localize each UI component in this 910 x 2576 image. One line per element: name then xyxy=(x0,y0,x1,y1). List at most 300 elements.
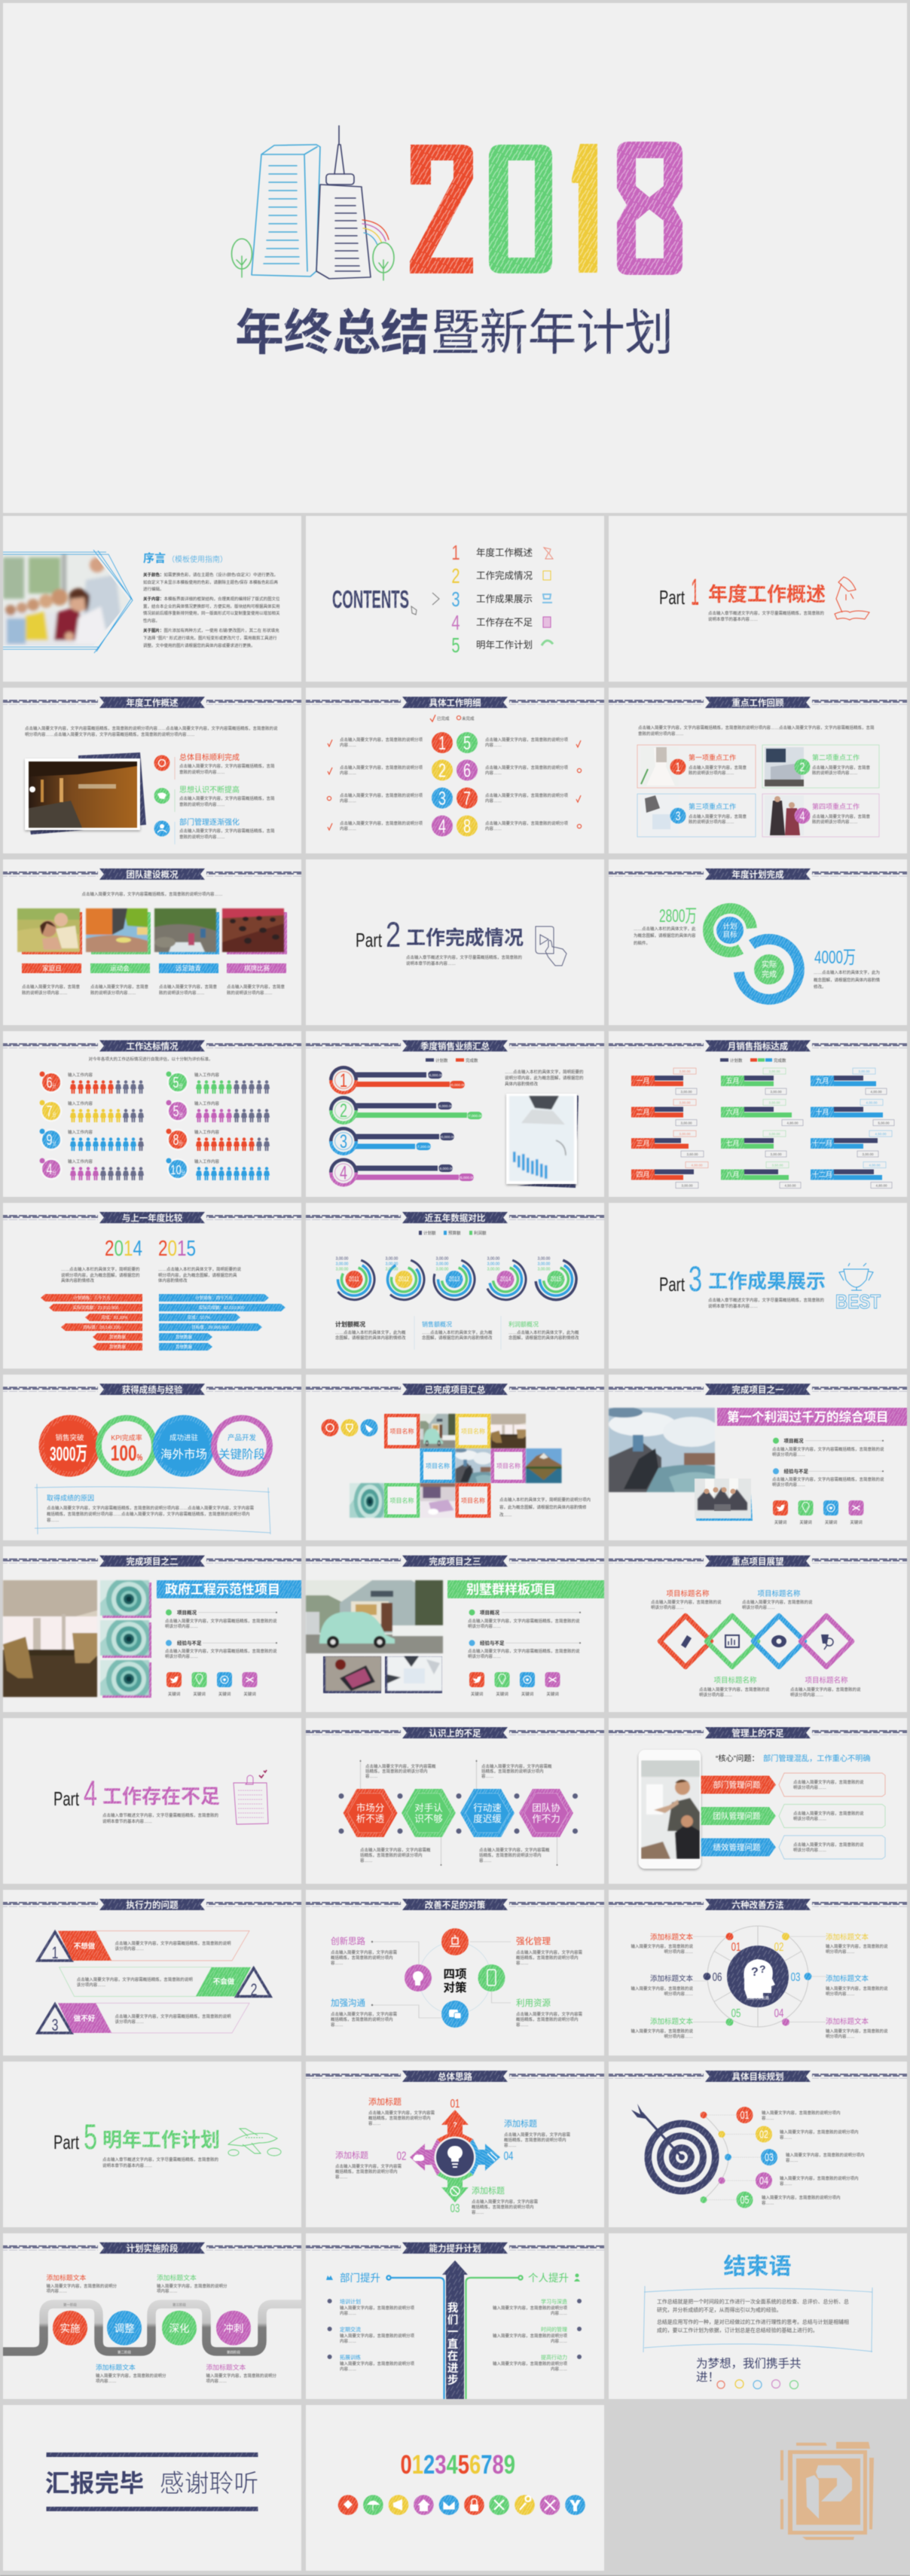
right list: 内容…… xyxy=(551,2310,567,2316)
legend: 完成数 xyxy=(466,1058,478,1064)
item: top: 点击输入简要文字内容，文字内容需 xyxy=(368,2110,435,2116)
header ribbon xyxy=(609,1555,907,1567)
item: left: 概括精炼，言简意赅的说明分项内 xyxy=(335,2169,398,2175)
item: project overview: 明该分项内容…… xyxy=(165,1623,198,1629)
right labels: 明分项内容…… xyxy=(826,1991,855,1997)
item: resources: 容…… xyxy=(516,2022,529,2028)
left list: 输入简要文字内容，言简意赅的说明分项 xyxy=(340,2305,415,2311)
ring chart 2012: 2012 xyxy=(399,1275,409,1283)
goal 02: 容…… xyxy=(780,2135,792,2141)
item: awareness: 点击输入简要文字内容，文字内容需概括精炼，言简 xyxy=(179,795,275,801)
phone with photo xyxy=(639,1750,701,1869)
description: 说明本章节的基本内容…… xyxy=(102,1818,152,1824)
icon: clipboard with hearts xyxy=(234,1770,268,1824)
row 2: not able: 该分项内容…… xyxy=(77,1982,105,1988)
item: management: 概括精炼，言简意赅的说明分项内 xyxy=(516,1955,579,1961)
ring chart 2015 xyxy=(530,1253,582,1305)
descriptions: 赅的说明该分项内容…… xyxy=(159,990,205,996)
arrow: department: 部门管理问题 xyxy=(713,1780,761,1790)
monthly unit: 十一月 xyxy=(811,1131,892,1157)
2015 arrows: 计划销售：四千万元 xyxy=(195,1295,233,1301)
header ribbon: 季度销售业绩汇总 xyxy=(420,1041,490,1051)
decorative hexagon frame lines xyxy=(3,550,133,653)
heading: part 3 xyxy=(659,1259,826,1299)
header ribbon xyxy=(306,1555,604,1567)
node dots and numbers: 03 xyxy=(791,1970,801,1983)
panel: closing text: 总结是应用写作的一种，是对已经做过的工作进行理性的思考。总结与计划是相辅相 xyxy=(657,2318,849,2325)
column: profit xyxy=(501,1316,579,1350)
slide: specific goals xyxy=(609,2062,907,2227)
item: project overview: 项目概况 xyxy=(480,1609,500,1616)
description: 点击输入章节概述文字内容，文字尽量需概括精炼，言简意赅的 xyxy=(406,954,523,960)
digit 8 xyxy=(617,142,682,275)
list labels xyxy=(476,547,533,651)
banner xyxy=(157,1580,301,1598)
central arrow: 一 xyxy=(447,2327,458,2339)
score row 4 left: 输入工作内容 xyxy=(68,1158,93,1164)
descriptions: 点击输入简要文字内容，言简意 xyxy=(90,984,149,990)
target illustration xyxy=(631,2104,719,2195)
wheel: ? xyxy=(751,1966,759,1979)
panel: reasons: 点击输入简要文字内容，文字内容需概括精炼，言简意赅的说明分项内容……点击输入简要文字内容，文字内容需 xyxy=(47,1505,255,1511)
header ribbon xyxy=(306,2242,604,2254)
item: communication xyxy=(331,1998,398,2028)
numbered circles: 4 xyxy=(438,816,446,837)
right tasks: 内容…… xyxy=(485,826,502,832)
intro text: 点击输入简要文字内容，文字内容需概括精炼，言简意赅的说明分项内容……点击输入简要文字内容，文字内容需概括精炼，言简 xyxy=(638,725,875,731)
road path xyxy=(3,2304,301,2352)
stat circle: sales: 销售突破 xyxy=(55,1433,84,1442)
label: stage three: 添加标题文本 xyxy=(157,2273,197,2281)
column: plan: ……点击输入本栏的具体文字，此为概 xyxy=(335,1329,406,1335)
score row 3 left xyxy=(39,1128,144,1151)
keyword icons: 关键词 xyxy=(521,1691,534,1697)
hexagon: rivals: 识不够 xyxy=(414,1814,443,1824)
card: second key work: 2 xyxy=(800,761,805,775)
item: right: 容…… xyxy=(504,2142,517,2148)
banner xyxy=(717,1408,907,1426)
monthly unit: 三月: 3,60.00 xyxy=(686,1152,698,1156)
usage guide text: 关于内容： xyxy=(143,596,164,602)
hexagon: market xyxy=(344,1789,398,1837)
monthly unit: 五月: 3,00.00 xyxy=(770,1090,782,1094)
goal 01: 容…… xyxy=(762,2115,774,2121)
slide: part 4 divider xyxy=(3,1718,301,1884)
header ribbon: 能力提升计划 xyxy=(429,2243,481,2254)
wheel: ? xyxy=(759,1963,766,1975)
goal 03: 容…… xyxy=(786,2157,799,2163)
usage guide text: 下选择 "图片" 形式进行填充。图片短变形或更改尺寸，需用裁剪工具进行 xyxy=(143,635,277,641)
hexagon: speed: 行动速 xyxy=(473,1803,502,1814)
branch lines xyxy=(386,2275,523,2399)
goal arc xyxy=(704,2115,728,2199)
monthly unit: 七月: 3,00.00 xyxy=(768,1132,780,1136)
intro text: 点击输入简要文字内容，文字内容需概括精炼，言简意赅的说明分项内容……点击输入简要文字内容，文字内容需概括精炼，言简意赅的说 xyxy=(25,725,278,731)
monthly unit: 五月: 五月 xyxy=(725,1077,740,1085)
monthly unit: 八月: 3,50.00 xyxy=(771,1163,783,1167)
usage guide text: 如自定义下未显示本模板使用的色彩，请删除主题色/保存 本模板色彩后再 xyxy=(143,579,279,585)
usage guide text: 关于图片： xyxy=(143,627,164,633)
digits: 0123456789 xyxy=(401,2450,515,2480)
item: project overview: 点击输入简要文字内容，文字内容需概括精炼，言简意赅的说 xyxy=(468,1618,580,1624)
bottom notes: 点击输入简要文字内容，文字内容需概 xyxy=(479,1847,550,1853)
card: first key work xyxy=(637,745,756,788)
keyword icons: 关键词 xyxy=(168,1691,181,1697)
score row 4 right xyxy=(166,1158,270,1180)
left tasks: 点击输入简要文字内容，言简意赅的说明分项 xyxy=(340,820,423,826)
list labels: 明年工作计划 xyxy=(476,640,533,651)
item: awareness: 意赅的说明分项内容…… xyxy=(179,801,225,807)
slide: overall approach xyxy=(306,2062,604,2227)
header ribbon xyxy=(3,1212,301,1223)
mosaic row 3: 项目名称 xyxy=(390,1497,414,1504)
item: management: 意赅的说明分项内容…… xyxy=(179,834,225,840)
column: sales: 销售额概况 xyxy=(422,1320,452,1328)
score row 4 right: 输入工作内容 xyxy=(194,1158,220,1164)
thanks text: 汇报完毕 xyxy=(45,2470,144,2497)
stat: actual 4000万: 概念图解，请根据您的具体内容酌情 xyxy=(814,977,881,983)
core question title: 部门管理混乱，工作重心不明确 xyxy=(763,1753,871,1763)
header ribbon xyxy=(3,1384,301,1395)
item: communication: 概括精炼，言简意赅的说明分项内 xyxy=(331,2016,393,2022)
item: project overview xyxy=(165,1609,277,1629)
top project text xyxy=(651,1589,813,1610)
column: sales: 念图解，请根据您的具体内容酌情修改 xyxy=(422,1335,493,1341)
item: lessons: 明该分项内容…… xyxy=(165,1653,198,1659)
stat: actual 4000万 xyxy=(814,948,881,990)
four way arrows xyxy=(410,2110,500,2202)
heading: part 2: 工作完成情况 xyxy=(406,926,524,949)
header ribbon: 获得成绩与经验 xyxy=(122,1384,183,1395)
monthly unit: 五月: 3,00.00 xyxy=(768,1070,780,1073)
header ribbon: 近五年数据对比 xyxy=(425,1213,486,1223)
chart: actual ring xyxy=(739,939,799,1000)
2014 arrows: 完成：91.33% xyxy=(101,1314,128,1320)
monthly unit: 六月 xyxy=(721,1100,803,1125)
arrow numbers xyxy=(397,2096,514,2214)
column: profit: ……点击输入本栏的具体文字，此为概 xyxy=(508,1329,579,1335)
panel: reasons: 容…… xyxy=(47,1517,60,1523)
card: second key work: 赅的说明该分项内容…… xyxy=(812,770,858,776)
2015 arrows: 其他数据 xyxy=(176,1334,192,1340)
monthly unit: 八月: 八月 xyxy=(725,1170,740,1178)
photo: team at table xyxy=(695,1479,753,1521)
mosaic row 2: 项目名称 xyxy=(426,1462,450,1470)
slide: team building xyxy=(3,859,301,1025)
top project text: 点击输入简要文字内容，言简意赅的说 xyxy=(651,1599,722,1605)
node dots and numbers: 01 xyxy=(731,1940,741,1953)
score row 2 right: 5分 xyxy=(173,1103,183,1120)
slide: part 5 divider xyxy=(3,2062,301,2227)
ring chart 2013: 2013 xyxy=(449,1275,460,1283)
item: project overview: 点击输入简要文字内容，文字内容需概括精炼，言简意赅的说 xyxy=(772,1446,884,1452)
right list: 内容…… xyxy=(551,2338,567,2344)
descriptions: 赅的说明该分项内容…… xyxy=(227,990,273,996)
mosaic row 1: 项目名称 xyxy=(390,1427,414,1435)
list numbers xyxy=(451,542,460,658)
right tasks: 内容…… xyxy=(485,770,502,776)
road labels: 第四阶段 xyxy=(227,2350,240,2355)
item: management: 点击输入简要文字内容，文字内容需 xyxy=(516,1949,583,1955)
item: lessons: 经验与不足 xyxy=(177,1639,202,1647)
item: awareness: 思想认识不断提高 xyxy=(179,785,240,795)
stat circle: overseas xyxy=(153,1415,215,1477)
right list: 时间的管理 xyxy=(541,2326,567,2333)
road labels xyxy=(63,2302,240,2355)
label: stage two: 输入简要文字内容，言简意赅的说明分 xyxy=(96,2373,166,2379)
item: management xyxy=(154,817,275,844)
list labels: 工作成果展示 xyxy=(476,594,533,604)
ring chart 2014: 2014 xyxy=(500,1275,511,1283)
item: communication: 容…… xyxy=(331,2022,344,2028)
hexagon: market: 析不透 xyxy=(356,1814,385,1824)
node dots and numbers: 05 xyxy=(731,2006,741,2019)
score row 3 right: 输入工作内容 xyxy=(194,1129,220,1135)
stage circles: 调整 xyxy=(115,2323,134,2334)
stat: actual 4000万: 4000万 xyxy=(814,948,856,968)
digit 2 xyxy=(410,145,473,273)
right labels: 添加标题文本 xyxy=(826,1974,869,1983)
card: second key work: 第二项重点工作 xyxy=(812,753,860,762)
list labels: 工作存在不足 xyxy=(476,618,533,628)
goal 01 xyxy=(701,2107,841,2123)
stat: plan 2800万: 的稿件。 xyxy=(634,940,650,946)
ring chart 2011 xyxy=(328,1253,380,1305)
header ribbon xyxy=(306,1899,604,1910)
quarter bars 2 xyxy=(329,1096,483,1125)
stage circles: 冲刺 xyxy=(223,2323,244,2334)
right tasks: 内容…… xyxy=(485,798,502,804)
header ribbon xyxy=(3,868,301,880)
icon: trophy and best xyxy=(835,1263,881,1313)
left list: 内容…… xyxy=(340,2366,356,2372)
center label: 四项 xyxy=(443,1968,467,1981)
item: resources: 利用资源 xyxy=(516,1998,551,2008)
heading: part 2: Part xyxy=(356,929,383,951)
descriptions: 点击输入简要文字内容，言简意 xyxy=(227,984,286,990)
mosaic row 3: 项目名称 xyxy=(461,1497,485,1504)
node dots and numbers: 02 xyxy=(774,1940,784,1953)
item: lessons xyxy=(468,1639,581,1659)
slide: achievements and experience xyxy=(3,1375,301,1540)
left tasks: 内容…… xyxy=(340,826,356,832)
labels: 远足踏青 xyxy=(176,964,201,972)
quarter bars 1: 20,000.00 xyxy=(449,1083,466,1088)
2014 arrows: 其他数据 xyxy=(109,1334,126,1340)
central arrow: 进 xyxy=(447,2362,459,2375)
item: left: 点击输入简要文字内容，文字内容需 xyxy=(335,2163,402,2169)
left tasks: 点击输入简要文字内容，言简意赅的说明分项 xyxy=(340,737,423,743)
top project text: 明该分项内容…… xyxy=(742,1604,775,1610)
header ribbon xyxy=(306,2071,604,2082)
item: bottom: 概括精炼，言简意赅的说明分项内 xyxy=(472,2204,534,2210)
stat: actual 4000万: ……点击输入本栏的具体文字，此为 xyxy=(814,969,880,975)
score row 4 left: 4分 xyxy=(46,1161,56,1178)
monthly unit: 五月 xyxy=(721,1068,786,1094)
chart: actual ring: 实际 xyxy=(762,960,777,969)
goal 05: 05 xyxy=(741,2193,749,2206)
numbered circles xyxy=(432,732,478,837)
ring chart 2015: 3,00.00 xyxy=(538,1267,551,1271)
slide: part 2 divider xyxy=(306,859,604,1025)
row 2: not able xyxy=(60,1967,270,2000)
stat circle: product xyxy=(211,1415,273,1477)
row 2: not able: 不会做 xyxy=(213,1977,235,1986)
right labels: 输入简要文字内容，言简意赅的说 xyxy=(826,2028,888,2034)
legend: 计划数 xyxy=(435,1058,448,1064)
central arrow xyxy=(442,2260,468,2399)
numbered circles: 7 xyxy=(463,788,471,809)
thanks text: 感谢聆听 xyxy=(160,2470,258,2497)
usage guide text: 如需更换色彩，请在主题色（设计/颜色/自定义）中进行更改。 xyxy=(164,572,278,578)
item: lessons: 点击输入简要文字内容，文字内容需概括精炼，言简意赅的说 xyxy=(772,1476,884,1482)
header ribbon: 认识上的不足 xyxy=(429,1728,481,1738)
quarter bars 3: 17,200.00 xyxy=(415,1145,432,1149)
core question title: “核心”问题： xyxy=(716,1755,759,1763)
labels: 家庭日 xyxy=(42,964,62,972)
chart: actual ring: 完成 xyxy=(762,969,777,979)
diamond icons xyxy=(681,1634,833,1650)
slide: completed project one xyxy=(605,1375,907,1540)
keyword icons: 关键词 xyxy=(799,1519,812,1525)
chart: plan ring: 目标 xyxy=(722,930,737,939)
panel: closing text: 成的，要以工作计划为依据，订计划总是在总结经验的基础上进行的。 xyxy=(657,2327,818,2333)
label: stage four xyxy=(206,2363,277,2384)
heading: part 1 xyxy=(659,571,826,613)
chart: plan ring xyxy=(708,908,752,952)
item: awareness xyxy=(154,785,275,812)
item: management: 容…… xyxy=(516,1960,529,1966)
legend: 利润额 xyxy=(474,1230,487,1236)
description: 说明本章节的基本内容…… xyxy=(406,960,456,966)
monthly unit: 九月: 4,00.00 xyxy=(870,1090,882,1094)
score row 3 right xyxy=(166,1128,270,1151)
usage guide text: 进行编辑。 xyxy=(143,586,164,592)
slide: implementation stages xyxy=(3,2233,301,2399)
stage circles xyxy=(53,2311,251,2346)
hexagon: speed xyxy=(460,1789,515,1837)
bottom project text: 项目标题名称 xyxy=(713,1676,757,1685)
keyword icons: 关键词 xyxy=(218,1691,231,1697)
mosaic row 1 xyxy=(384,1414,526,1448)
intro text: 点击输入简要文字内容，文字内容需概括精炼，言简意赅的说明分项内容…… xyxy=(81,891,223,897)
bottom notes xyxy=(360,1837,557,1866)
slide: key work review xyxy=(609,688,907,853)
arrow: team: 团队管理问题 xyxy=(713,1811,761,1821)
2015 arrows: 目标值：39,065,800 xyxy=(191,1324,229,1330)
keyword icons: 关键词 xyxy=(193,1691,206,1697)
box: department: 明该分项内容…… xyxy=(793,1784,826,1790)
node dots and numbers: 06 xyxy=(713,1970,722,1983)
row 3: poorly done: 3 xyxy=(52,2017,58,2035)
item: lessons: 点击输入简要文字内容，文字内容需概括精炼，言简意赅的说 xyxy=(165,1648,277,1654)
quarter bars 1: 16,000.00 xyxy=(427,1073,444,1078)
slide: specific work details xyxy=(306,688,604,853)
left list: 输入简要文字内容，言简意赅的说明分项 xyxy=(340,2333,415,2339)
heading: part 3: 工作成果展示 xyxy=(708,1270,826,1293)
ring chart 2015: 2015 xyxy=(551,1275,562,1283)
wheel: 思路决定出路 xyxy=(747,1996,769,2001)
heading: part 2 xyxy=(356,914,524,954)
labels: 棋牌比赛 xyxy=(244,964,270,972)
quarter bars 4: 25,000.00 xyxy=(458,1176,475,1180)
branch headings: 部门提升 xyxy=(340,2272,380,2284)
2014 arrows xyxy=(41,1294,142,1351)
heading: part 1: Part xyxy=(659,586,686,609)
monthly unit: 十月: 十月 xyxy=(815,1107,829,1116)
usage guide text: 情况前前后顺序重新排列使用，同一版面形式可以复制重复使用以增加相关 xyxy=(143,610,280,616)
header ribbon: 年度工作概述 xyxy=(127,697,179,708)
ring chart 2013 xyxy=(428,1253,481,1305)
monthly unit: 七月: 七月 xyxy=(725,1140,740,1147)
left labels: 明分项内容…… xyxy=(664,2034,693,2040)
item: bottom: 点击输入简要文字内容，文字内容需 xyxy=(472,2199,539,2205)
photo: office lobby xyxy=(25,752,146,835)
column: profit: 利润额概况 xyxy=(508,1320,539,1328)
left tasks: 内容…… xyxy=(340,770,356,776)
item: project overview: 点击输入简要文字内容，文字内容需概括精炼，言简意赅的说 xyxy=(165,1618,277,1624)
monthly unit: 三月: 三月 xyxy=(636,1140,650,1147)
monthly unit: 二月: 3,00.00 xyxy=(680,1121,692,1125)
header ribbon xyxy=(609,868,907,880)
heading: part 5: Part xyxy=(53,2131,80,2153)
monthly unit: 四月: 四月 xyxy=(636,1170,650,1178)
monthly unit: 四月 xyxy=(631,1161,708,1189)
item: lessons xyxy=(772,1467,884,1488)
icon row xyxy=(338,2495,585,2515)
row 3: poorly done: 点击输入简要文字内容，文字内容需概括精炼，言简意赅的说明 xyxy=(115,2013,231,2019)
heading: 序言（模板使用指南） xyxy=(143,551,228,565)
list numbers: 3 xyxy=(451,588,460,612)
monthly unit: 四月: 4,00.00 xyxy=(691,1163,703,1167)
left labels: 明分项内容…… xyxy=(664,1949,693,1955)
2015 arrows: 完成：107% xyxy=(188,1314,210,1320)
top notes: 点击输入简要文字内容，文字内容需概 xyxy=(365,1763,436,1769)
legend: 预算额 xyxy=(448,1230,461,1236)
goal 01: 输入简要文字内容，言简意赅的说明分项内 xyxy=(762,2110,841,2116)
header ribbon xyxy=(3,1899,301,1910)
heading: part 3: Part xyxy=(659,1273,686,1296)
score row 1 left: 6分 xyxy=(46,1074,56,1091)
description: 说明本章节的基本内容…… xyxy=(708,1303,758,1309)
node dots and numbers xyxy=(693,1933,826,2026)
stat circle: product: 关键阶段 xyxy=(218,1448,265,1461)
score row 3 left: 输入工作内容 xyxy=(68,1129,93,1135)
goal 05 xyxy=(701,2192,841,2208)
arrow: performance xyxy=(701,1838,776,1856)
card: third key work: 点击输入简要文字内容，言简意 xyxy=(689,813,747,819)
photo: chess match xyxy=(222,908,287,954)
item: innovation xyxy=(331,1936,398,1966)
quarter bars 4: 4 xyxy=(340,1162,347,1183)
slide: monthly sales indicators xyxy=(609,1031,907,1197)
right labels: 添加标题文本 xyxy=(826,2017,869,2026)
goal 03: 输入简要文字内容，言简意赅的说明分项内 xyxy=(786,2152,865,2158)
ring chart 2014: 3,00.00 xyxy=(487,1262,500,1267)
top project text: 项目标题名称 xyxy=(666,1589,710,1598)
row 2: not able: 点击输入简要文字内容，文字内容需概括精炼，言简意赅的说明 xyxy=(77,1976,193,1982)
ring chart 2014: 3,00.00 xyxy=(487,1256,500,1261)
goal 02: 输入简要文字内容，言简意赅的说明分项内 xyxy=(780,2129,859,2135)
monthly unit: 七月: 3,00.00 xyxy=(770,1152,782,1156)
header ribbon: 改善不足的对策 xyxy=(425,1900,486,1910)
item: top: 概括精炼，言简意赅的说明分项内 xyxy=(368,2115,431,2121)
column: sales xyxy=(414,1316,493,1350)
photo: team thumbs up xyxy=(3,554,131,648)
intro text: 明分项内容……点击输入简要文字内容，文字内容需概括精炼，言简意赅的说明分项内容…… xyxy=(25,731,195,737)
row 1: not willing: 点击输入简要文字内容，文字内容需概括精炼，言简意赅的说明 xyxy=(115,1940,231,1946)
descriptions: ……点击输入本栏的具体文字，简明扼要的说 xyxy=(158,1266,242,1272)
